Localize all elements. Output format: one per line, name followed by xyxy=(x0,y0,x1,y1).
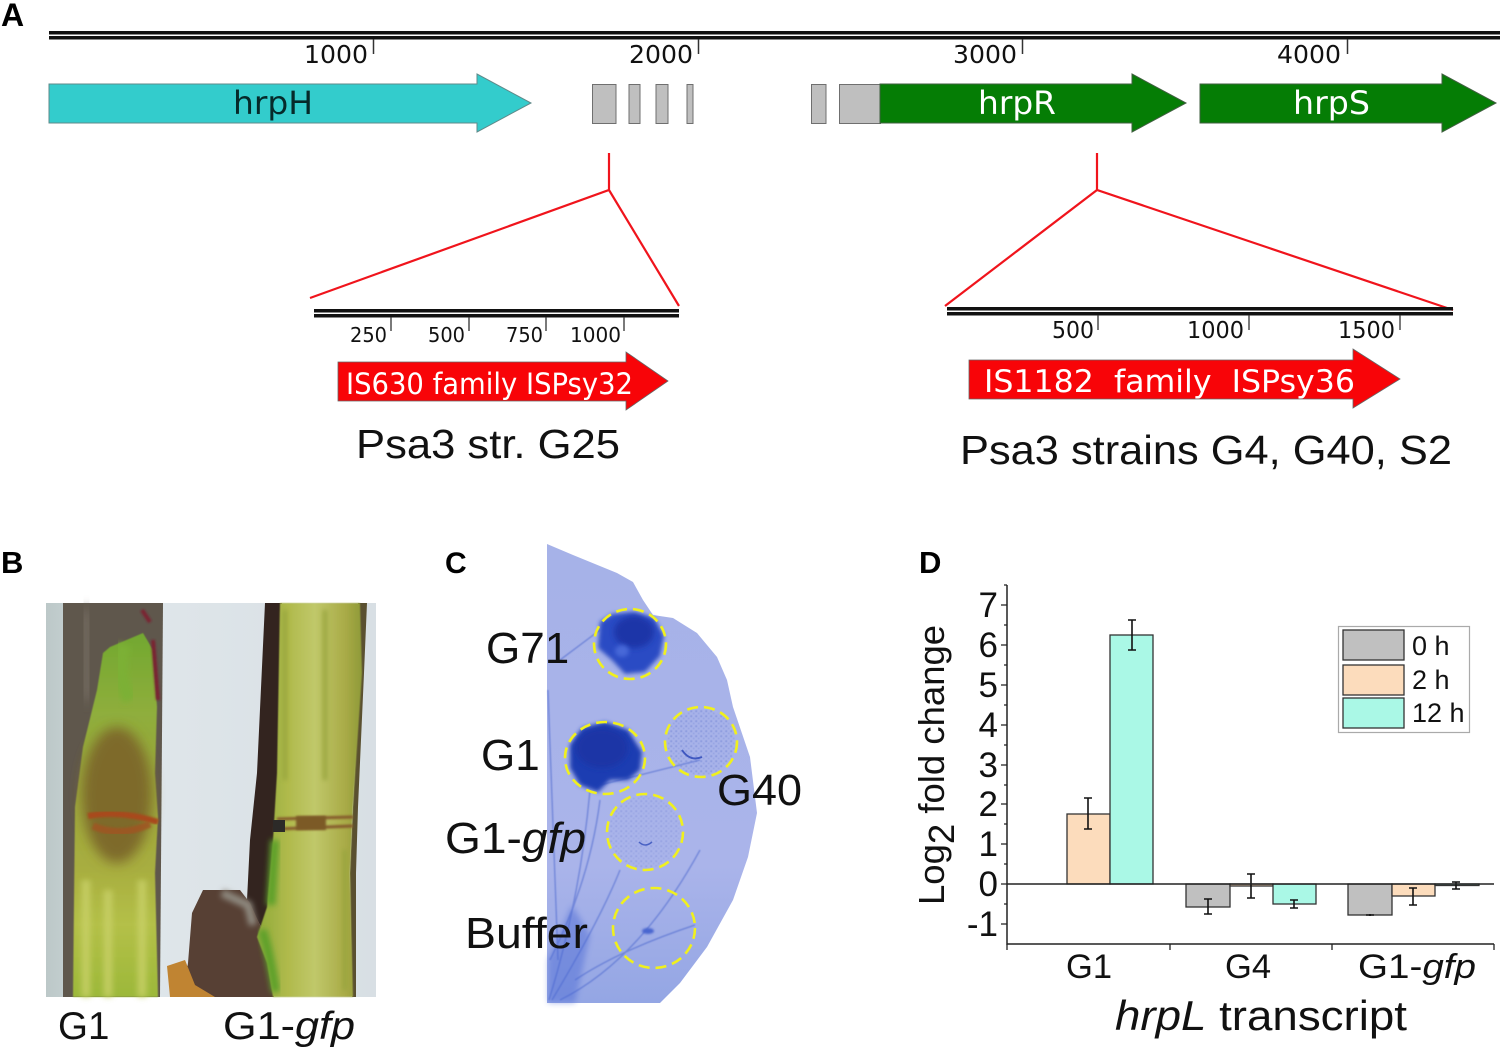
gene arrow: hrpH xyxy=(49,74,531,132)
gene arrow: hrpH: hrpH xyxy=(233,84,313,122)
panel label: C: C xyxy=(445,547,467,580)
panel C: stained leaf xyxy=(547,544,757,1003)
gene arrow: hrpS xyxy=(1200,74,1496,132)
y tick labels: 0 xyxy=(979,865,998,904)
spot: G1-gfp xyxy=(607,794,683,870)
strain label: G25: Psa3 str. G25 xyxy=(356,421,620,467)
x tick labels: G4 xyxy=(1225,948,1271,986)
right insertion ruler: 1500 xyxy=(1338,318,1395,344)
red insertion callout left xyxy=(310,153,679,306)
leaf label: G1: G1 xyxy=(481,731,540,780)
panel label: D: D xyxy=(919,545,941,580)
axes xyxy=(1007,585,1494,944)
y tick labels: 7 xyxy=(979,586,998,625)
insertion element arrow: IS1182 xyxy=(969,349,1400,408)
right insertion ruler: 1000 xyxy=(1187,318,1244,344)
leaf label: G1-gfp: G1-gfp xyxy=(445,814,586,863)
insertion element arrow: IS630 xyxy=(338,352,668,410)
y tick labels: 6 xyxy=(979,626,998,665)
x axis title: hrpL transcript xyxy=(1115,992,1407,1039)
top scale ruler: 1000 xyxy=(304,40,368,69)
legend: 2 h xyxy=(1412,665,1450,695)
spot: G1 xyxy=(565,722,645,794)
gene arrow: hrpR: hrpR xyxy=(978,84,1056,122)
y tick labels: 3 xyxy=(979,746,998,785)
gene arrow: hrpR xyxy=(880,74,1186,132)
leaf label: G71: G71 xyxy=(486,624,569,673)
spot: G40 xyxy=(665,707,737,777)
stem label: G1: G1 xyxy=(58,1005,109,1048)
top scale ruler: 2000 xyxy=(629,40,693,69)
insertion element arrow: IS630: IS630 family ISPsy32 xyxy=(346,367,633,401)
left insertion ruler: 500 xyxy=(428,323,465,347)
bars xyxy=(1067,635,1479,915)
left insertion ruler: 750 xyxy=(506,323,543,347)
y tick labels: 4 xyxy=(979,706,998,745)
panel label: B: B xyxy=(1,545,23,580)
panel D: bar chart xyxy=(911,585,1494,1039)
top scale ruler: 4000 xyxy=(1277,40,1341,69)
right insertion ruler xyxy=(947,307,1453,344)
legend xyxy=(1338,626,1470,732)
gene arrow: hrpS: hrpS xyxy=(1293,84,1370,122)
top scale ruler: 3000 xyxy=(953,40,1017,69)
insertion element arrow: IS1182: IS1182 family ISPsy36 xyxy=(984,364,1355,400)
error bars xyxy=(1084,620,1460,916)
y axis title: 2 xyxy=(921,824,962,844)
panel A: gene map xyxy=(49,31,1500,473)
y tick labels: 5 xyxy=(979,666,998,705)
y axis title: fold change xyxy=(911,625,952,824)
leaf veins xyxy=(548,630,700,1000)
spot: G71 xyxy=(594,609,666,679)
x tick labels: G1-gfp xyxy=(1358,948,1476,986)
y tick labels: 1 xyxy=(979,825,998,864)
red insertion callout right xyxy=(945,153,1453,310)
left stem G1 xyxy=(63,603,163,997)
strain label: G4 G40 S2: Psa3 strains G4, G40, S2 xyxy=(960,427,1452,473)
x tick labels: G1 xyxy=(1066,948,1112,986)
spot: Buffer xyxy=(613,888,695,968)
legend: 0 h xyxy=(1412,631,1450,661)
y tick labels xyxy=(967,586,998,944)
y axis title: Log xyxy=(911,844,952,905)
right insertion ruler: 500 xyxy=(1052,318,1094,344)
x tick labels xyxy=(1066,948,1476,986)
y tick labels: 2 xyxy=(979,785,998,824)
stem label: G1-gfp: G1-gfp xyxy=(223,1005,355,1048)
left insertion ruler: 1000 xyxy=(570,323,621,347)
left insertion ruler xyxy=(314,309,679,347)
intergenic grey segments xyxy=(592,84,880,124)
left insertion ruler: 250 xyxy=(350,323,387,347)
legend: 12 h xyxy=(1412,698,1465,728)
leaf blade xyxy=(547,544,757,1003)
top scale ruler xyxy=(49,31,1500,69)
right stem G1-gfp xyxy=(167,603,367,997)
leaf label: Buffer: Buffer xyxy=(465,909,588,958)
leaf label: G40: G40 xyxy=(717,766,802,815)
y tick labels: -1 xyxy=(967,905,998,944)
panel B: stem photo xyxy=(46,603,376,997)
